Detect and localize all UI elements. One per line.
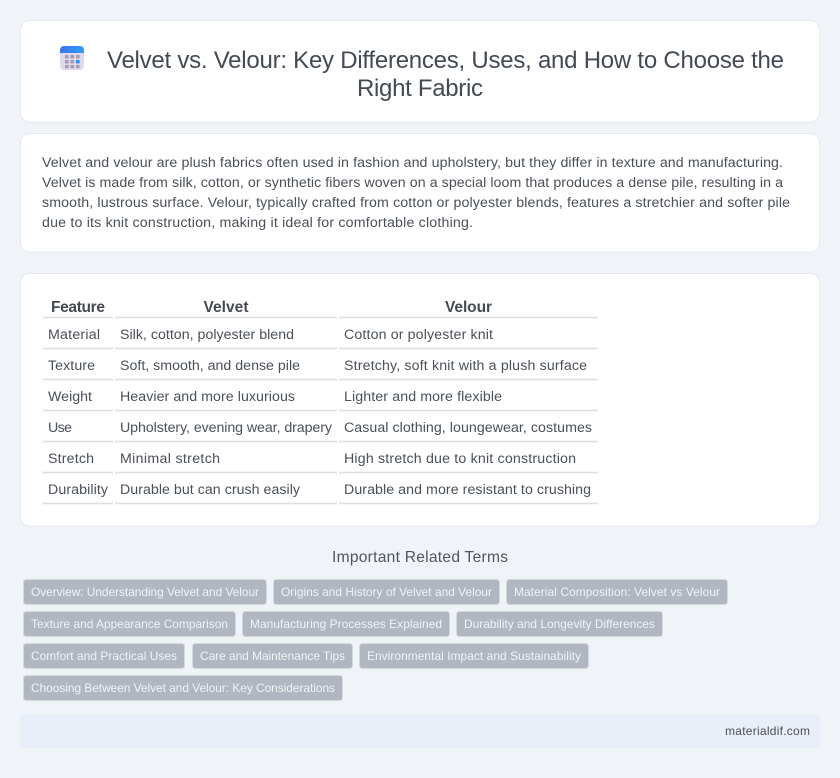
icon: calendar — [60, 46, 84, 70]
row: use: Casual clothing, loungewear, costumes — [344, 420, 592, 436]
row: durability: Durable but can crush easily — [120, 482, 301, 498]
tag: Durability and Longevity Differences — [464, 617, 655, 631]
row: material: Cotton or polyester knit — [344, 327, 493, 343]
row: stretch: High stretch due to knit construction — [344, 451, 576, 467]
panel: comparison table — [20, 274, 820, 526]
row: use — [48, 420, 592, 436]
row: stretch — [48, 451, 576, 467]
row: material: Material — [48, 327, 100, 343]
text block: introduction: smooth, lustrous surface. Velour, typically crafted from cotton or polyester blends, features a stretchier and softer pile — [42, 195, 790, 211]
row: material — [48, 327, 493, 343]
tag: Environmental Impact and Sustainability — [367, 649, 581, 663]
row: texture: Stretchy, soft knit with a plush surface — [344, 358, 587, 374]
footer: materialdif.com — [725, 724, 810, 738]
tag — [456, 612, 662, 636]
row: texture — [48, 358, 587, 374]
row: weight: Heavier and more luxurious — [120, 389, 295, 405]
tag: Material Composition: Velvet vs Velour — [514, 585, 720, 599]
row: use: Upholstery, evening wear, drapery — [120, 420, 333, 436]
row: stretch: Stretch — [48, 451, 94, 467]
panel: related term tags — [24, 580, 728, 700]
tag — [24, 580, 266, 604]
row: durability: Durable and more resistant to crushing — [344, 482, 591, 498]
tag — [192, 644, 352, 668]
row: durability — [48, 482, 591, 498]
text block: introduction: Velvet is made from silk, cotton, or synthetic fibers woven on a special loom that produces a dense pile, resulting in a — [42, 175, 783, 191]
row: use: Use — [48, 420, 72, 436]
table header: Velvet — [204, 299, 248, 316]
tag — [24, 644, 184, 668]
text block: introduction: Velvet and velour are plush fabrics often used in fashion and upholstery, but they differ in texture and manufacturing. — [42, 155, 783, 171]
row: material: Silk, cotton, polyester blend — [120, 327, 294, 343]
row: durability: Durability — [48, 482, 109, 498]
tag — [24, 676, 342, 700]
text block: introduction — [42, 155, 790, 231]
row: weight: Weight — [48, 389, 92, 405]
tag: Overview: Understanding Velvet and Velour — [31, 585, 259, 599]
tag — [274, 580, 500, 604]
tag — [360, 644, 588, 668]
row: stretch: Minimal stretch — [120, 451, 220, 467]
row: texture: Soft, smooth, and dense pile — [120, 358, 300, 374]
panel: title card — [20, 20, 820, 122]
text block: introduction: due to its knit construction, making it ideal for comfortable clothing. — [42, 215, 473, 231]
tag: Choosing Between Velvet and Velour: Key Considerations — [31, 681, 335, 695]
title: Right Fabric — [357, 75, 483, 102]
row: texture: Texture — [48, 358, 95, 374]
table header: Velour — [445, 299, 492, 316]
tag: Origins and History of Velvet and Velour — [281, 585, 492, 599]
table header — [51, 299, 492, 316]
tag: Comfort and Practical Uses — [31, 649, 177, 663]
row: weight — [48, 389, 502, 405]
tag: Manufacturing Processes Explained — [250, 617, 442, 631]
tag — [24, 612, 236, 636]
title: Velvet vs. Velour: Key Differences, Uses, and How to Choose the — [107, 47, 784, 74]
tag: Texture and Appearance Comparison — [31, 617, 228, 631]
footer — [20, 714, 820, 748]
tag — [506, 580, 728, 604]
table header: Feature — [51, 299, 105, 316]
tag: Care and Maintenance Tips — [200, 649, 345, 663]
panel: introduction — [20, 134, 820, 252]
title — [107, 47, 784, 102]
tag — [242, 612, 450, 636]
row: weight: Lighter and more flexible — [344, 389, 502, 405]
heading: related terms: Important Related Terms — [332, 549, 508, 566]
